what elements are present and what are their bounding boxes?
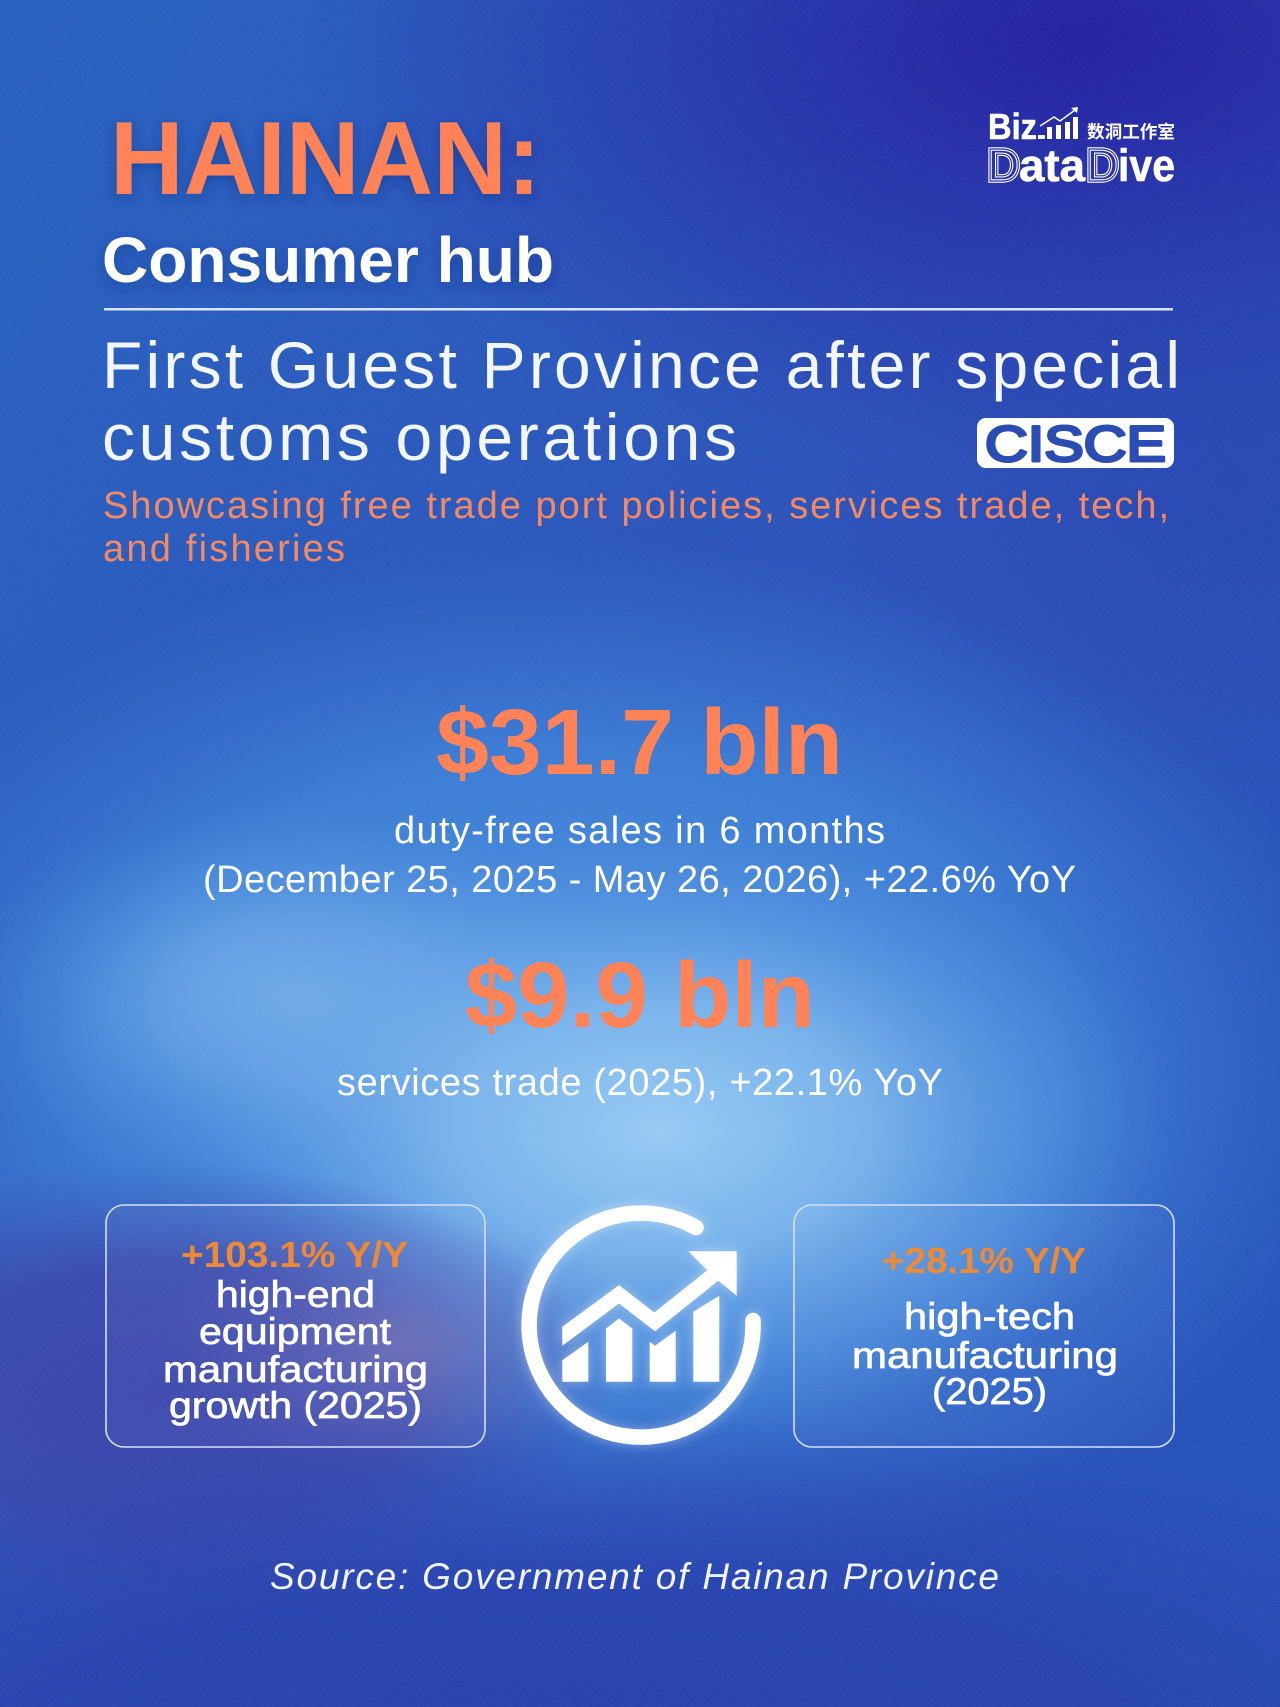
- logo wordmark: DataDive: D: [987, 139, 1020, 191]
- logo wordmark: DataDive: D: [987, 139, 1020, 191]
- title: HAINAN:: [110, 101, 541, 217]
- stat: duty-free sales: [203, 690, 1076, 901]
- logo wordmark: Biz: Biz: [988, 106, 1037, 147]
- panel description: growth (2025): [169, 1385, 422, 1426]
- logo: CISCE: CISCE: [985, 416, 1166, 472]
- logo wordmark: DataDive: D: [1086, 139, 1119, 191]
- logo wordmark: DataDive: ive: [1118, 140, 1175, 191]
- stat description: (December 25, 2025 - May 26, 2026), +22.6% YoY: [203, 859, 1076, 901]
- panel: high-tech manufacturing: [794, 1205, 1174, 1447]
- stat value: $31.7 bln: [436, 690, 843, 794]
- panel description: [852, 1296, 1118, 1412]
- subtitle: Consumer hub: [102, 224, 554, 296]
- logo wordmark: DataDive: ata: [1019, 140, 1086, 191]
- headline: First Guest Province after special: [102, 328, 1180, 402]
- headline: customs operations: [102, 400, 737, 474]
- headline: [102, 328, 1180, 474]
- panel description: (2025): [932, 1371, 1047, 1412]
- stat: services trade: [337, 943, 943, 1104]
- source: Source: Government of Hainan Province: [270, 1556, 999, 1597]
- logo wordmark: DataDive: D: [1086, 139, 1119, 191]
- icon: growth chart in circle: [529, 1213, 753, 1437]
- growth figure: +28.1% Y/Y: [882, 1240, 1086, 1281]
- panel description: equipment: [199, 1311, 392, 1352]
- logo icon: bars and arrow: [1038, 107, 1078, 139]
- stat description: duty-free sales in 6 months: [394, 810, 885, 852]
- description: and fisheries: [103, 528, 345, 570]
- logo chinese name: 数洞工作室: [1087, 122, 1175, 142]
- growth figure: +103.1% Y/Y: [181, 1234, 408, 1275]
- panel: high-end equipment: [106, 1205, 485, 1447]
- panel description: high-tech: [904, 1296, 1075, 1337]
- panel description: [163, 1274, 428, 1426]
- panel description: manufacturing: [852, 1335, 1118, 1376]
- description: [103, 485, 1169, 570]
- stat description: [203, 810, 1076, 901]
- logo: Biz DataDive: [987, 106, 1175, 191]
- stat description: services trade (2025), +22.1% YoY: [337, 1062, 943, 1104]
- panel description: manufacturing: [163, 1349, 428, 1390]
- logo wordmark: DataDive: [987, 139, 1175, 191]
- divider: [104, 308, 1173, 310]
- stat value: $9.9 bln: [465, 943, 815, 1047]
- panel description: high-end: [216, 1274, 375, 1315]
- description: Showcasing free trade port policies, services trade, tech,: [103, 485, 1169, 527]
